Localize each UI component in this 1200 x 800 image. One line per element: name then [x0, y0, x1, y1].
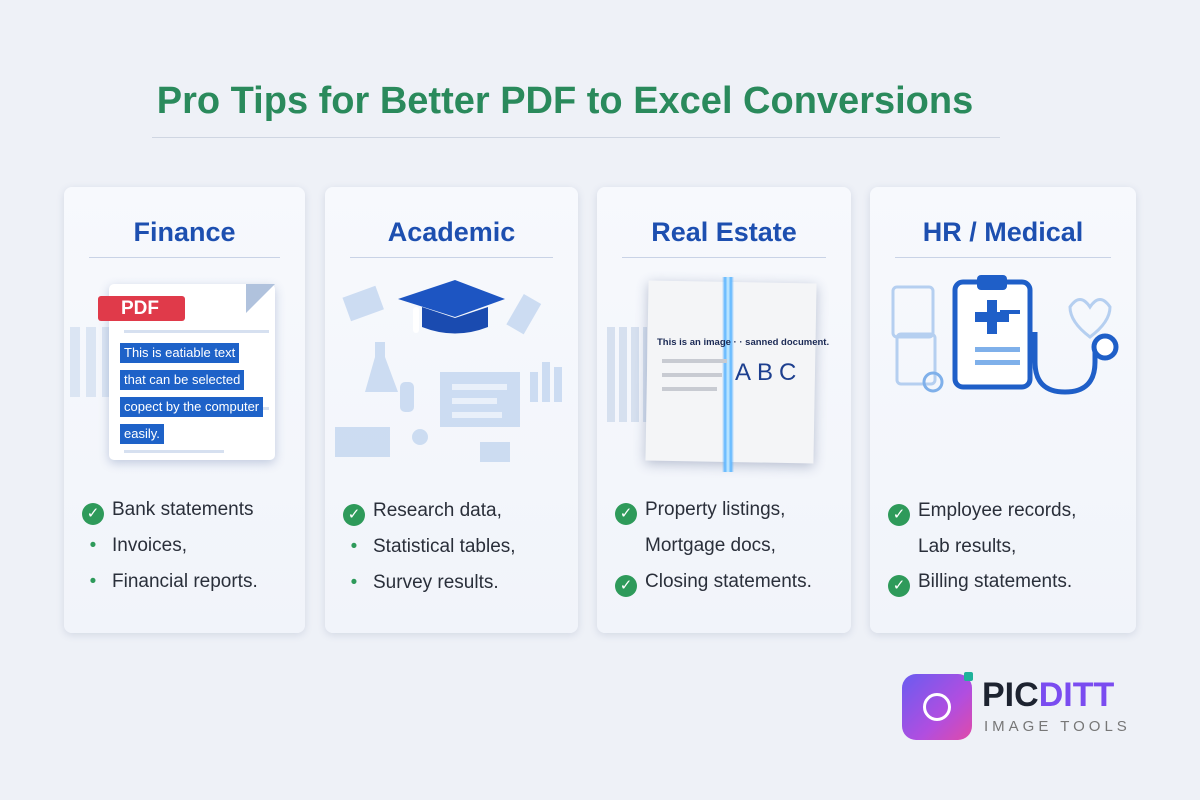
list: finance: •: [90, 571, 96, 592]
list: academic: •: [351, 536, 357, 557]
list: hr medical: ✓: [893, 506, 905, 523]
list: real estate: [615, 499, 812, 597]
list: real estate: Mortgage docs,: [645, 535, 776, 556]
logo: picditt: IMAGE TOOLS: [984, 718, 1131, 735]
heading: academic: Academic: [388, 217, 515, 247]
icon: pdf document: This is eatiable text: [124, 345, 235, 360]
icon: pdf document: [70, 282, 280, 468]
title: Pro Tips for Better PDF to Excel Conversions: [157, 80, 973, 122]
icon: clipboard and stethoscope: [892, 275, 1118, 394]
icon: pdf document: copect by the computer: [124, 399, 259, 414]
panel: finance: [64, 187, 305, 633]
list: real estate: ✓: [620, 505, 632, 522]
list: academic: Research data,: [373, 500, 502, 521]
list: academic: Statistical tables,: [373, 536, 516, 557]
list: academic: •: [351, 572, 357, 593]
logo: picditt: PICDITT: [982, 676, 1114, 714]
list: academic: [343, 500, 516, 593]
list: real estate: Property listings,: [645, 499, 785, 520]
icon: pdf document: PDF: [121, 298, 159, 319]
list: finance: Bank statements: [112, 499, 254, 520]
list: hr medical: Billing statements.: [918, 571, 1072, 592]
icon: scanned document: This is an image · · sanned document.: [657, 337, 829, 348]
list: hr medical: Lab results,: [918, 536, 1016, 557]
list: finance: Financial reports.: [112, 571, 258, 592]
icon: scanned document: [607, 277, 829, 473]
list: finance: •: [90, 535, 96, 556]
list: hr medical: ✓: [893, 577, 905, 594]
list: academic: ✓: [348, 506, 360, 523]
heading: finance: Finance: [133, 217, 236, 247]
heading: real estate: Real Estate: [651, 217, 797, 247]
icon: graduation cap with science icons: [335, 280, 562, 462]
list: finance: [82, 499, 258, 592]
icon: scanned document: ABC: [735, 359, 802, 386]
panel: hr medical: [870, 187, 1136, 633]
list: finance: ✓: [87, 505, 99, 522]
list: real estate: ✓: [620, 577, 632, 594]
panel: real estate: [597, 187, 851, 633]
list: hr medical: Employee records,: [918, 500, 1076, 521]
list: hr medical: [888, 500, 1076, 597]
heading: hr medical: HR / Medical: [923, 217, 1083, 247]
icon: pdf document: easily.: [124, 426, 160, 441]
icon: pdf document: that can be selected: [124, 372, 240, 387]
list: real estate: Closing statements.: [645, 571, 812, 592]
panel: academic: [325, 187, 578, 633]
list: academic: Survey results.: [373, 572, 499, 593]
list: finance: Invoices,: [112, 535, 187, 556]
logo: picditt: [902, 672, 1131, 740]
